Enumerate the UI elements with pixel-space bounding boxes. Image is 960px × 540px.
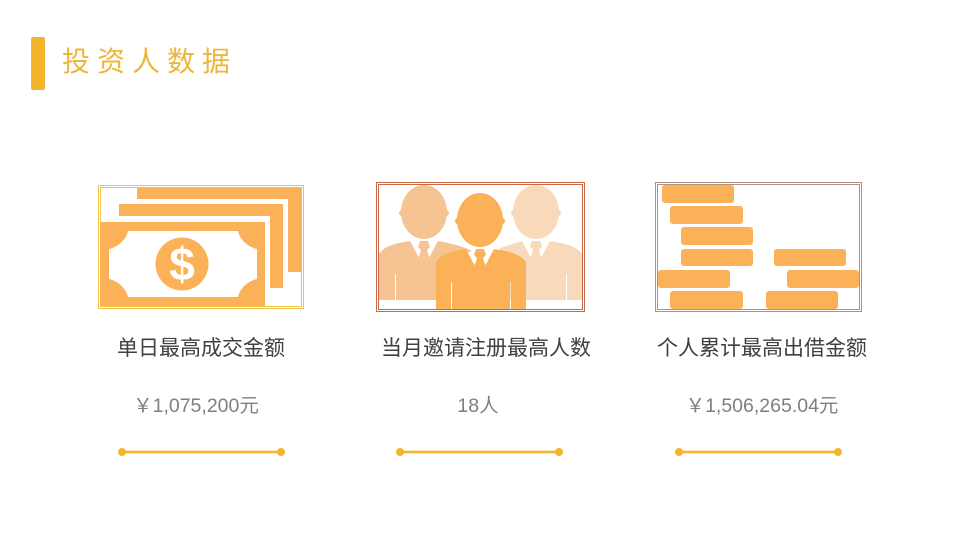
title: 投资人数据 [62, 46, 237, 77]
label: monthly invites: 当月邀请注册最高人数 [381, 337, 591, 360]
value: single day: ￥1,075,200元 [133, 395, 259, 417]
value: monthly invites: 18人 [457, 395, 499, 417]
icon: banknotes: $ [169, 238, 195, 290]
title accent bar [31, 37, 45, 90]
value: personal total: ￥1,506,265.04元 [686, 395, 838, 417]
label: personal total: 个人累计最高出借金额 [657, 337, 867, 360]
label: single day: 单日最高成交金额 [117, 337, 285, 360]
